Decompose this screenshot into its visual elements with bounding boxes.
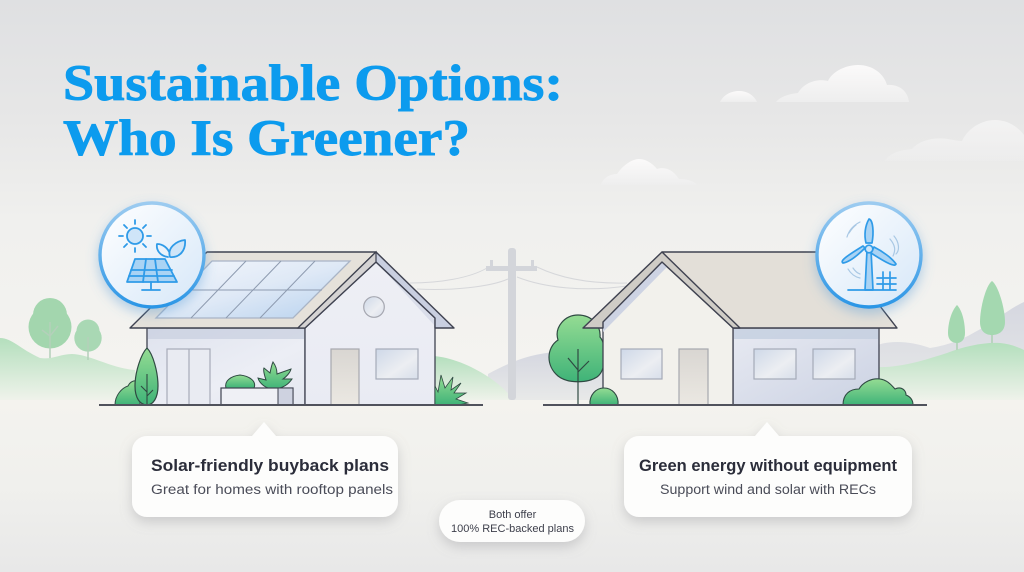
right house main roof xyxy=(662,252,897,328)
left house gable wall xyxy=(305,262,435,405)
window xyxy=(376,349,418,379)
bush: left xyxy=(115,381,140,405)
ground line: right xyxy=(543,404,927,406)
solar array xyxy=(156,261,350,318)
callout: both offer: Both offer xyxy=(489,509,537,521)
door xyxy=(679,349,708,405)
callout: green energy without equipment: Support wind and solar with RECs xyxy=(660,482,876,497)
house: right without panels xyxy=(583,252,897,405)
window left xyxy=(621,349,662,379)
title: Sustainable Options: xyxy=(63,56,563,112)
faded trees left xyxy=(28,298,102,360)
house: left with solar panels xyxy=(130,252,454,405)
cloud: right edge xyxy=(885,120,1024,161)
title: Who Is Greener? xyxy=(63,111,470,167)
front door xyxy=(331,349,359,405)
title xyxy=(63,56,563,167)
callout: solar-friendly plans xyxy=(132,422,398,517)
background sky xyxy=(0,0,1024,402)
left house main roof xyxy=(130,252,376,328)
background hills: green centre xyxy=(434,356,515,402)
sliding door xyxy=(167,349,210,405)
left house wing wall xyxy=(147,328,305,405)
ground line: left xyxy=(99,404,483,406)
icon badge: wind turbine xyxy=(817,203,921,307)
icon badge: solar and leaf xyxy=(100,203,204,307)
callout: solar-friendly plans: Solar-friendly buyback plans xyxy=(151,457,389,475)
background hills: grey right xyxy=(875,302,1024,402)
utility pole and wires xyxy=(410,248,627,400)
callout: both offer: 100% REC-backed plans xyxy=(451,523,574,535)
bush: small round xyxy=(590,388,618,405)
planter with plants xyxy=(221,362,293,405)
left house gable trim xyxy=(298,252,454,328)
callout: solar-friendly plans: Great for homes with rooftop panels xyxy=(151,482,393,497)
cloud: top large xyxy=(776,65,909,102)
tree: right round xyxy=(549,315,605,405)
callout: green energy without equipment: Green energy without equipment xyxy=(639,457,897,475)
round attic window xyxy=(364,297,384,317)
window centre xyxy=(754,349,796,379)
window right xyxy=(813,349,855,379)
cloud: top small xyxy=(720,91,757,102)
right house wing wall xyxy=(733,328,879,405)
fern plant xyxy=(435,375,468,405)
ground xyxy=(0,400,1024,572)
faded trees right xyxy=(948,281,1005,350)
bush: large xyxy=(843,379,913,405)
right house gable wall xyxy=(603,262,733,405)
background hills: green right xyxy=(878,343,1024,402)
background hills: grey centre xyxy=(488,352,610,402)
right house gable trim xyxy=(583,252,740,328)
cloud: centre xyxy=(601,159,697,185)
callout: green energy without equipment xyxy=(624,422,912,517)
background hills: left xyxy=(0,338,140,402)
tree: left cypress xyxy=(135,348,158,405)
callout: both offer xyxy=(439,500,585,542)
